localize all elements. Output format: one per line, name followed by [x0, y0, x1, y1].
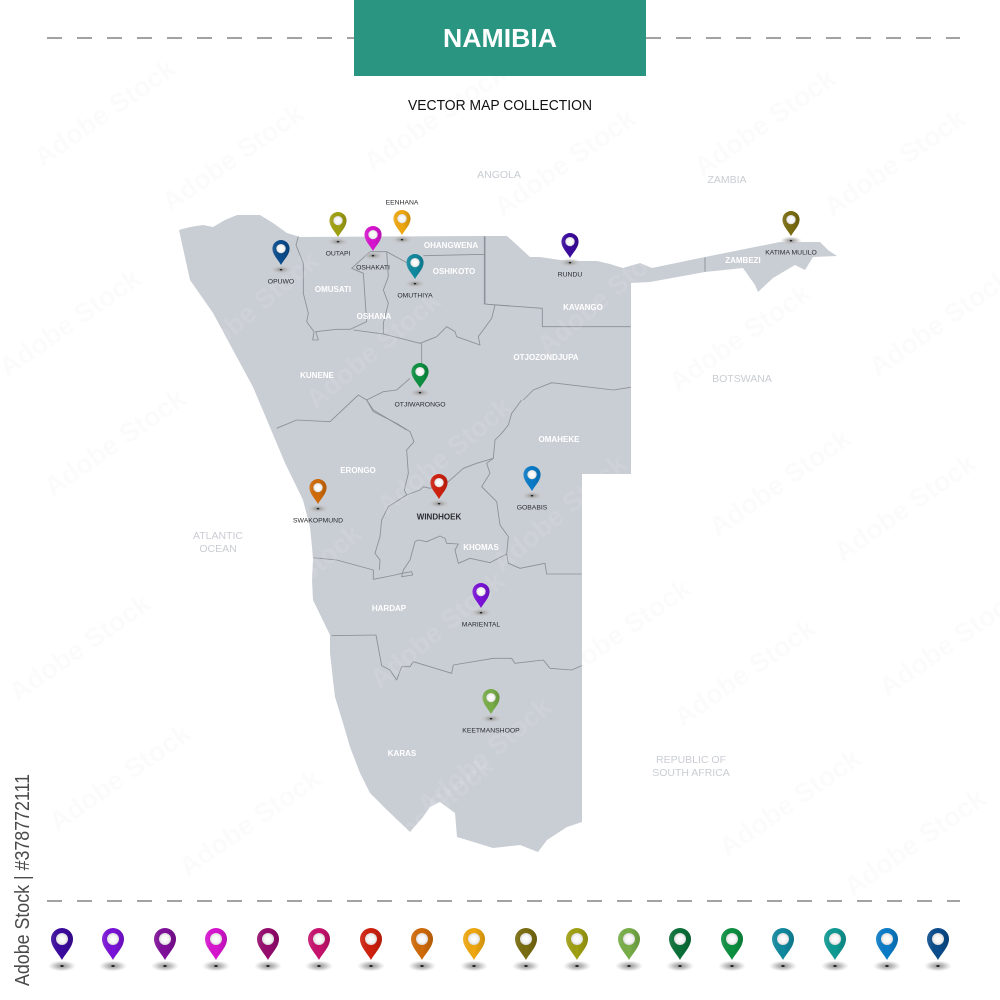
city pin: Outapi [326, 212, 351, 258]
watermark over map: Adobe Stock [300, 285, 447, 415]
city pin: Opuwo [268, 240, 294, 286]
region labels: ZAMBEZI [725, 256, 761, 265]
region labels: HARDAP [372, 604, 407, 613]
top dashed line [47, 37, 960, 39]
stock image credit: Adobe Stock | #378772111 [12, 774, 34, 986]
northern region borders [277, 237, 510, 430]
watermark over map: Adobe Stock [411, 691, 558, 821]
city pin: Opuwo: OPUWO [268, 278, 294, 286]
country outline [179, 215, 837, 852]
city pin: Oshakati [356, 226, 390, 272]
neighbouring country labels: BOTSWANA [712, 373, 772, 385]
neighbouring country labels: ZAMBIA [707, 174, 747, 186]
city pin: Rundu: RUNDU [558, 272, 582, 278]
central and southern region borders [313, 400, 582, 680]
bottom dashed line [47, 900, 960, 902]
city pin: Swakopmund: SWAKOPMUND [293, 518, 343, 524]
region labels: OHANGWENA [424, 241, 478, 250]
watermark over map: Adobe Stock [353, 750, 500, 880]
neighbouring country labels: REPUBLIC OF [656, 754, 726, 766]
title banner [354, 0, 646, 76]
city pin: Eenhana: EENHANA [386, 200, 419, 206]
watermark over map: Adobe Stock [531, 231, 678, 361]
city pin: Rundu [558, 233, 582, 278]
watermark over map: Adobe Stock [371, 391, 518, 521]
watermark over map: Adobe Stock [221, 518, 368, 648]
city pin: Mariental: MARIENTAL [462, 622, 500, 628]
city pin: Mariental [462, 583, 500, 628]
pin colour legend row [48, 928, 952, 972]
watermark over map: Adobe Stock [178, 245, 325, 375]
eastern region borders [484, 236, 705, 400]
city pin: Otjiwarongo [394, 363, 446, 408]
region labels: KAVANGO [563, 303, 603, 312]
region labels: OMUSATI [315, 285, 351, 294]
city pin: Katima Mulilo [765, 211, 817, 256]
city pin: Windhoek: WINDHOEK [417, 512, 461, 522]
region labels: OTJOZONDJUPA [513, 353, 579, 362]
city pin: Keetmanshoop [462, 689, 520, 734]
city pin: Swakopmund [293, 479, 343, 524]
region labels: KARAS [388, 749, 417, 758]
watermark over map: Adobe Stock [364, 565, 511, 695]
region labels: ERONGO [340, 466, 376, 475]
city pin: Otjiwarongo: OTJIWARONGO [394, 402, 446, 408]
neighbouring country labels [193, 169, 772, 779]
neighbouring country labels: SOUTH AFRICA [652, 767, 730, 779]
city pin: Oshakati: OSHAKATI [356, 264, 390, 272]
neighbouring country labels: OCEAN [199, 543, 237, 555]
city pin: Gobabis: GOBABIS [517, 504, 548, 512]
map of Namibia [178, 215, 837, 880]
city pin: Outapi: OUTAPI [326, 250, 351, 258]
title banner: NAMIBIA [443, 23, 557, 53]
city pin: Omuthiya: OMUTHIYA [397, 292, 433, 300]
region labels: OSHANA [357, 312, 392, 321]
city pin: Eenhana [386, 200, 419, 244]
neighbouring country labels: ATLANTIC [193, 530, 243, 542]
city pin: Omuthiya [397, 254, 433, 300]
watermark over map [178, 231, 678, 880]
subtitle: VECTOR MAP COLLECTION [408, 98, 592, 114]
city pin: Katima Mulilo: KATIMA MULILO [765, 250, 817, 256]
city pin: Windhoek [417, 474, 461, 522]
region labels: OMAHEKE [539, 435, 580, 444]
city pin: Keetmanshoop: KEETMANSHOOP [462, 728, 520, 734]
region labels: KHOMAS [463, 543, 499, 552]
region labels: KUNENE [300, 371, 335, 380]
neighbouring country labels: ANGOLA [477, 169, 521, 181]
watermark over map: Adobe Stock [486, 448, 633, 578]
city pin: Gobabis [517, 466, 548, 512]
region labels: OSHIKOTO [433, 267, 475, 276]
region labels [300, 241, 761, 758]
